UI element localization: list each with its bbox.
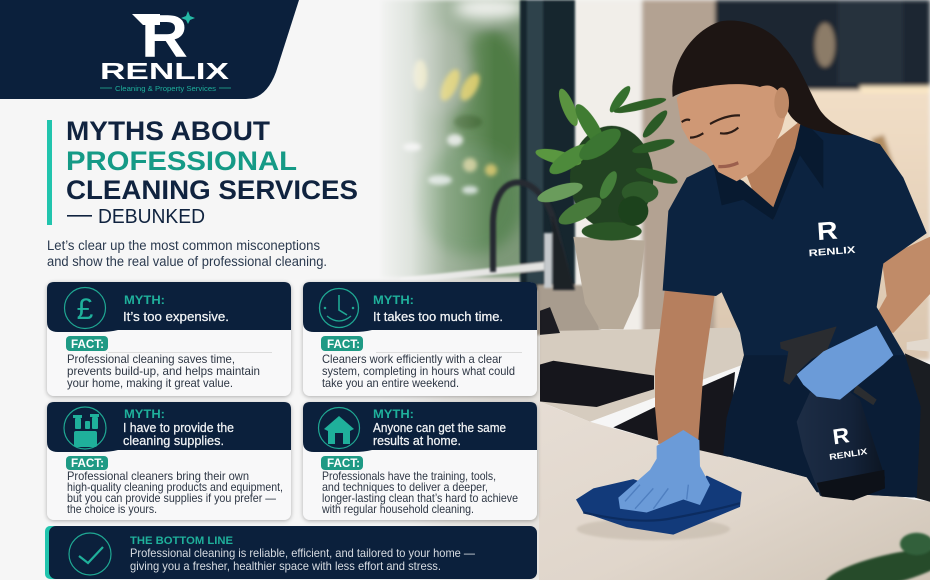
fact text: with regular household cleaning. <box>321 503 474 516</box>
bottom line text: giving you a fresher, healthier space with less effort and stress. <box>130 559 441 573</box>
eyes and mouth <box>682 115 740 167</box>
fact chip: FACT: <box>327 339 360 351</box>
bottom line heading: THE BOTTOM LINE <box>130 535 233 547</box>
right arm <box>870 237 930 333</box>
icon: clock <box>320 288 358 328</box>
back counter and sink <box>540 307 743 459</box>
myth text: MYTH: <box>124 407 165 421</box>
fact chip <box>66 456 108 470</box>
window frame <box>400 0 600 335</box>
title: CLEANING SERVICES <box>66 175 358 205</box>
left glove <box>618 430 710 512</box>
photo: woman, plant and counter <box>534 21 930 580</box>
icon: pound <box>64 288 106 328</box>
fact text: the choice is yours. <box>67 503 157 516</box>
myth text <box>123 407 234 448</box>
spray bottle: RENLIX <box>829 447 869 462</box>
shirt logo: R <box>816 216 839 246</box>
fact text: Professional cleaners bring their own <box>67 470 249 483</box>
logo mark: R <box>141 3 188 70</box>
fact text: prevents build-up, and helps maintain <box>67 364 260 378</box>
intro text: Let’s clear up the most common misconeptions <box>47 238 320 253</box>
fact text: Cleaners work efficiently with a clear <box>322 352 502 366</box>
fact text: your home, making it great value. <box>67 376 233 390</box>
fact chip <box>66 336 108 351</box>
myth text: It takes too much time. <box>373 309 503 324</box>
myth text: cleaning supplies. <box>123 433 224 448</box>
title: MYTHS ABOUT <box>66 116 271 146</box>
cloth <box>576 475 742 540</box>
myth text: MYTH: <box>373 293 414 307</box>
right glove <box>797 326 893 400</box>
title: DEBUNKED <box>98 206 205 228</box>
myth text <box>373 293 503 324</box>
hair <box>672 21 853 135</box>
panel: myth 2 <box>303 282 537 396</box>
fact text: but you can provide supplies if you prefer — <box>67 492 276 505</box>
panel: myth 4 <box>303 402 537 520</box>
far plant corner <box>822 533 930 580</box>
fact chip: FACT: <box>327 458 360 470</box>
intro text <box>47 238 327 269</box>
fact chip <box>321 456 363 470</box>
icon: cleaning supplies <box>64 407 106 449</box>
fact text: Professionals have the training, tools, <box>322 470 496 483</box>
icon: check <box>69 533 111 575</box>
fact text: high-quality cleaning products and equipment, <box>67 481 283 494</box>
spray bottle <box>780 326 885 500</box>
logo mark <box>132 3 195 70</box>
icon: house <box>318 408 360 448</box>
logo banner <box>0 0 299 99</box>
icon: pound: £ <box>77 293 94 326</box>
shirt logo: RENLIX <box>808 244 857 258</box>
myth text: It’s too expensive. <box>123 309 229 324</box>
face <box>677 70 788 181</box>
fact chip: FACT: <box>71 458 104 470</box>
title <box>47 116 358 228</box>
countertop <box>539 401 930 580</box>
fact chip: FACT: <box>71 339 104 351</box>
myth text <box>123 293 229 324</box>
myth text: results at home. <box>373 433 461 448</box>
fact text <box>321 470 518 516</box>
intro text: and show the real value of professional cleaning. <box>47 254 327 269</box>
fact text <box>67 352 260 390</box>
myth text: I have to provide the <box>123 420 234 435</box>
bottom line text <box>130 546 475 573</box>
title: PROFESSIONAL <box>66 146 297 176</box>
fact text: take you an entire weekend. <box>322 376 459 390</box>
fact text <box>67 470 283 516</box>
myth text <box>373 407 506 448</box>
photo fade to white <box>375 0 495 580</box>
myth text: MYTH: <box>124 293 165 307</box>
fact text: longer-lasting clean that’s hard to achieve <box>322 492 518 505</box>
brand tagline: Cleaning & Property Services <box>115 84 216 93</box>
ear <box>774 87 789 118</box>
brand name: RENLIX <box>100 58 230 84</box>
myth text: MYTH: <box>373 407 414 421</box>
photo: blurred kitchen background <box>380 0 930 580</box>
fact text <box>322 352 515 390</box>
shirt logo <box>807 215 857 258</box>
bottom line text: Professional cleaning is reliable, efficient, and tailored to your home — <box>130 546 475 560</box>
spray bottle: R <box>831 424 851 450</box>
panel: myth 1 <box>47 282 291 396</box>
far right lower cabinet <box>905 353 930 502</box>
myth text: Anyone can get the same <box>373 420 506 435</box>
fact chip <box>321 336 363 351</box>
fact text: system, completing in hours what could <box>322 364 515 378</box>
fact text: Professional cleaning saves time, <box>67 352 235 366</box>
icon: faucet <box>493 182 575 290</box>
left arm <box>655 289 715 444</box>
neck <box>743 118 807 222</box>
panel: bottom line <box>45 526 537 579</box>
shirt and trousers <box>663 118 927 498</box>
plant <box>534 83 679 329</box>
fact text: and techniques to deliver a deeper, <box>322 481 488 494</box>
panel: myth 3 <box>47 402 291 520</box>
